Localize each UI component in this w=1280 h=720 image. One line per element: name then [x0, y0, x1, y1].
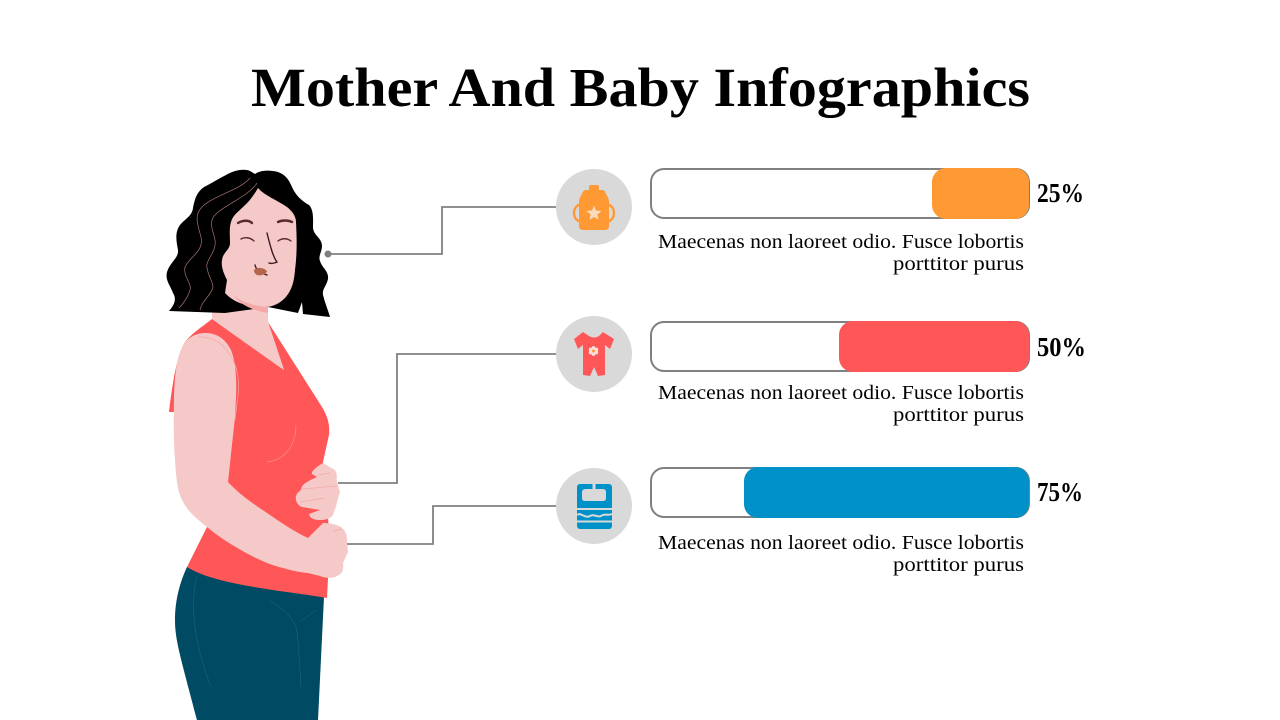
description 2: Maecenas non laoreet odio. Fusce lobortis — [658, 382, 1024, 404]
description 1 — [658, 231, 1024, 275]
description 1: Maecenas non laoreet odio. Fusce lobortis — [658, 231, 1024, 253]
connector: head to bottle — [324, 207, 556, 258]
arm and left hand — [174, 333, 348, 578]
description 2 — [658, 382, 1024, 426]
progress bar: 50% — [651, 321, 1029, 372]
value: 75%: 75% — [1037, 477, 1083, 507]
progress bar: 75% — [651, 467, 1029, 518]
hair — [167, 170, 330, 317]
description 3: porttitor purus — [893, 554, 1024, 576]
icon: baby romper — [556, 316, 632, 392]
facial features — [238, 220, 292, 275]
value: 50%: 50% — [1037, 332, 1086, 362]
description 3: Maecenas non laoreet odio. Fusce lobortis — [658, 532, 1024, 554]
description 1: porttitor purus — [893, 253, 1024, 275]
trousers — [175, 567, 324, 720]
neck shadow — [233, 295, 268, 313]
icon: sippy bottle — [556, 169, 632, 245]
illustration: pregnant woman — [167, 170, 348, 720]
icon: baby bib — [556, 468, 632, 544]
mouth — [254, 268, 267, 275]
hair strands — [179, 178, 257, 310]
description 3 — [658, 532, 1024, 576]
connector: upper hand to romper — [338, 354, 556, 483]
clothing and finger creases — [198, 337, 342, 531]
flower — [589, 346, 598, 356]
shirt — [169, 319, 330, 598]
progress bar: 25% — [651, 168, 1029, 219]
face — [222, 188, 297, 307]
value: 25%: 25% — [1037, 178, 1084, 208]
right hand — [296, 463, 340, 520]
title: Mother And Baby Infographics — [251, 57, 1030, 118]
description 2: porttitor purus — [893, 404, 1024, 426]
neck — [212, 295, 284, 370]
connector: lower hand to bib — [347, 506, 556, 544]
